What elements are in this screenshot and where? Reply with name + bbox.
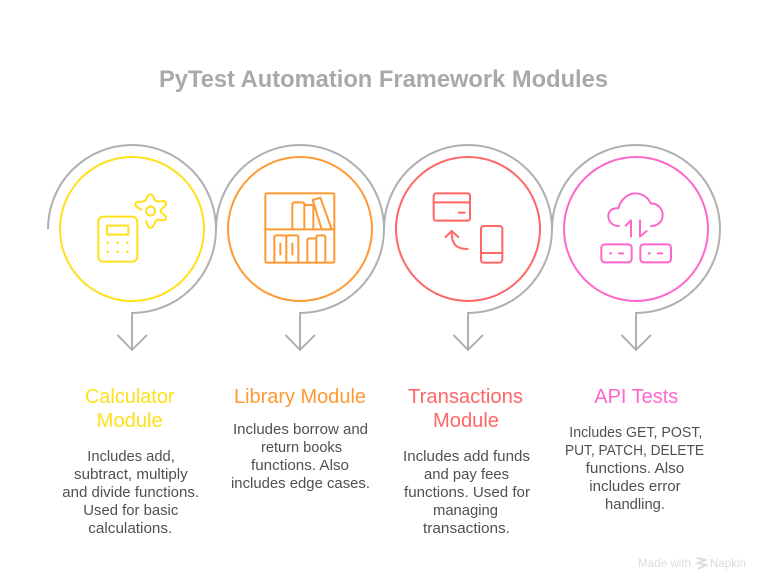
panel: library module [216,145,384,492]
text: library description [231,421,370,492]
text: api tests description: includes error [589,478,681,495]
circle: library [228,157,372,301]
text: api tests description [565,424,704,513]
watermark: made with napkin [638,558,746,570]
circle: transactions [396,157,540,301]
outer arc arrow: api tests [552,145,720,350]
heading: calculator module: Calculator [85,386,175,408]
text: calculator description [62,448,199,537]
text: calculator description: Used for basic [83,502,179,519]
text: library description: return books [261,439,342,456]
icon: calculator and gear [98,194,166,262]
text: transactions description: and pay fees [424,466,509,483]
text: calculator description: calculations. [88,520,172,537]
text: transactions description [403,448,530,537]
heading: api tests: API Tests [594,386,678,408]
text: calculator description: Includes add, [87,448,175,465]
circle: calculator [60,157,204,301]
text: library description: Includes borrow and [233,421,368,438]
text: library description: functions. Also [251,457,349,474]
heading: calculator module: Module [97,410,163,432]
outer arc arrow: library [216,145,384,350]
text: library description: includes edge cases. [231,475,370,492]
text: transactions description: transactions. [423,520,510,537]
text: transactions description: functions. Used for [404,484,530,501]
heading: transactions module [408,386,523,432]
text: transactions description: managing [433,502,498,519]
icon: cloud and servers [601,193,671,262]
heading: library module: Library Module [234,386,366,408]
watermark: made with napkin: Napkin [710,558,746,570]
text: transactions description: Includes add funds [403,448,530,465]
circle: api tests [564,157,708,301]
text: api tests description: handling. [605,496,665,513]
outer arc arrow: calculator [48,145,216,350]
text: api tests description: functions. Also [586,460,684,477]
title: PyTest Automation Framework Modules [159,66,608,93]
panel: calculator module [48,145,216,537]
panel: api tests [552,145,720,513]
watermark: made with napkin: Made with [638,558,691,570]
text: calculator description: subtract, multiply [74,466,188,483]
heading: transactions module: Transactions [408,386,523,408]
heading: transactions module: Module [433,410,499,432]
text: calculator description: and divide functions. [62,484,199,501]
heading: calculator module [85,386,175,432]
text: api tests description: Includes GET, POST, [569,424,702,441]
outer arc arrow: transactions [384,145,552,350]
icon: bookshelf [265,193,334,263]
text: api tests description: PUT, PATCH, DELETE [565,442,704,459]
icon: card and phone transfer [434,193,502,263]
panel: transactions module [384,145,552,537]
